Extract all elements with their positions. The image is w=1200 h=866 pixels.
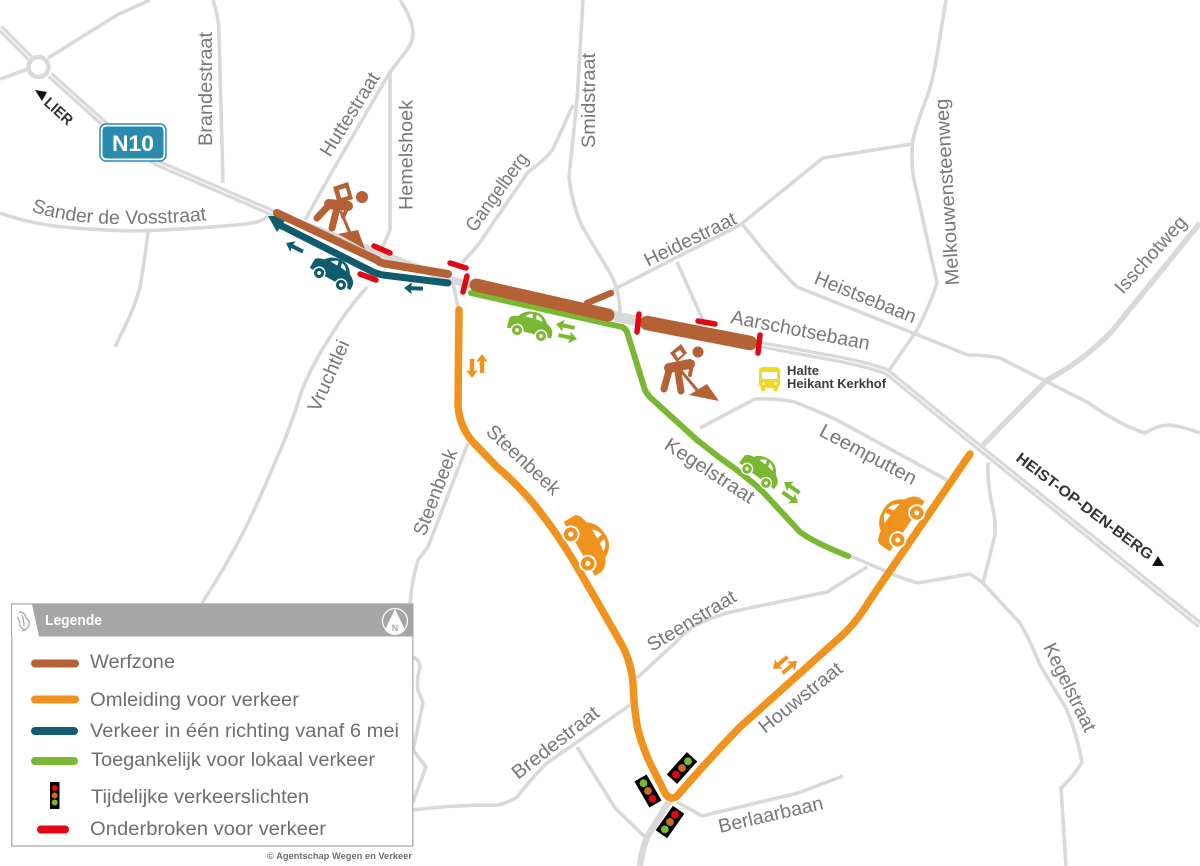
- arrow: teal one-way upper: [283, 238, 306, 257]
- icon: north arrow: [382, 608, 408, 635]
- legend item: local traffic: Toegankelijk voor lokaal verkeer: [91, 750, 376, 771]
- legend item: work zone: [35, 652, 175, 673]
- street labels: Berlaarbaan: [716, 792, 825, 838]
- street labels: Steenstraat: [643, 586, 741, 656]
- traffic light: west: [634, 775, 662, 807]
- icon: worker west: [317, 182, 368, 249]
- street labels: Bredestraat: [508, 702, 604, 784]
- legend header: Legende: [45, 613, 102, 629]
- street labels: Hemelshoek: [396, 100, 418, 210]
- street labels: Steenbeek: [409, 446, 462, 539]
- street labels: Isschotweg: [1110, 212, 1192, 298]
- street labels: Steenbeek: [482, 421, 565, 500]
- street labels: Leemputten: [816, 420, 920, 490]
- N10 road shield: N10: [112, 131, 154, 156]
- street labels: Melkouwensteenweg: [931, 98, 964, 286]
- street labels: Houwstraat: [754, 657, 848, 738]
- street labels: Heistsebaan: [811, 267, 920, 328]
- bus stop label: Heikant Kerkhof: [787, 377, 887, 391]
- panel: legend: [11, 604, 414, 846]
- legend item: work zone: Werfzone: [90, 652, 175, 673]
- icon: green car on Aarschotsebaan: [505, 306, 556, 345]
- legend item: traffic lights: [50, 782, 309, 809]
- arrows: orange two-way on Houwstraat: [769, 652, 801, 678]
- street labels: Gangelberg: [461, 149, 533, 236]
- icon: bus stop: [759, 367, 780, 391]
- N10 road shield: [100, 124, 166, 161]
- street labels: Kegelstraat: [1039, 640, 1101, 736]
- arrows: green two-way on Kegelstraat: [779, 477, 803, 508]
- street labels: Aarschotsebaan: [729, 306, 872, 355]
- street labels: Sander de Vosstraat: [32, 200, 206, 224]
- arrow: teal one-way lower: [404, 282, 423, 295]
- street labels: Heidestraat: [641, 208, 741, 271]
- icon: green car on Kegelstraat: [735, 446, 787, 494]
- street labels: Vruchtlei: [303, 337, 354, 415]
- icon: orange car on Steenbeek: [556, 507, 621, 580]
- work zone west: [277, 213, 448, 274]
- work zone centre: [476, 285, 611, 315]
- street labels: Smidstraat: [578, 52, 600, 148]
- bus stop label: [787, 364, 887, 391]
- legend item: closure: Onderbroken voor verkeer: [90, 819, 327, 840]
- street labels: Kegelstraat: [660, 434, 759, 509]
- icon: north arrow: N: [392, 623, 398, 633]
- legend item: traffic lights: Tijdelijke verkeerslichten: [91, 787, 309, 808]
- arrows: orange two-way on Steenbeek: [466, 354, 488, 378]
- detour route: [458, 310, 970, 798]
- street labels: Brandestraat: [195, 31, 217, 146]
- arrows: green two-way near Aarschotsebaan: [555, 318, 578, 345]
- legend item: detour: Omleiding voor verkeer: [90, 690, 300, 711]
- copyright: © Agentschap Wegen en Verkeer: [267, 851, 412, 862]
- traffic light: south: [656, 806, 684, 838]
- icon: worker east: [664, 344, 719, 401]
- traffic light: east: [667, 752, 697, 784]
- closures: [360, 246, 760, 353]
- street labels: Huttestraat: [316, 68, 385, 161]
- one-way traffic route: [268, 216, 448, 283]
- local traffic route: [471, 293, 848, 556]
- legend header: [11, 604, 414, 636]
- legend item: one-way: Verkeer in één richting vanaf 6 mei: [90, 721, 399, 742]
- direction label: Lier: LIER: [40, 94, 76, 129]
- bus stop label: Halte: [787, 364, 819, 378]
- icon: orange car on Houwstraat: [866, 485, 932, 556]
- work zone east: [647, 323, 750, 343]
- direction label: Heist-op-den-Berg: HEIST-OP-DEN-BERG: [1013, 450, 1156, 564]
- icon: teal car: [307, 249, 361, 296]
